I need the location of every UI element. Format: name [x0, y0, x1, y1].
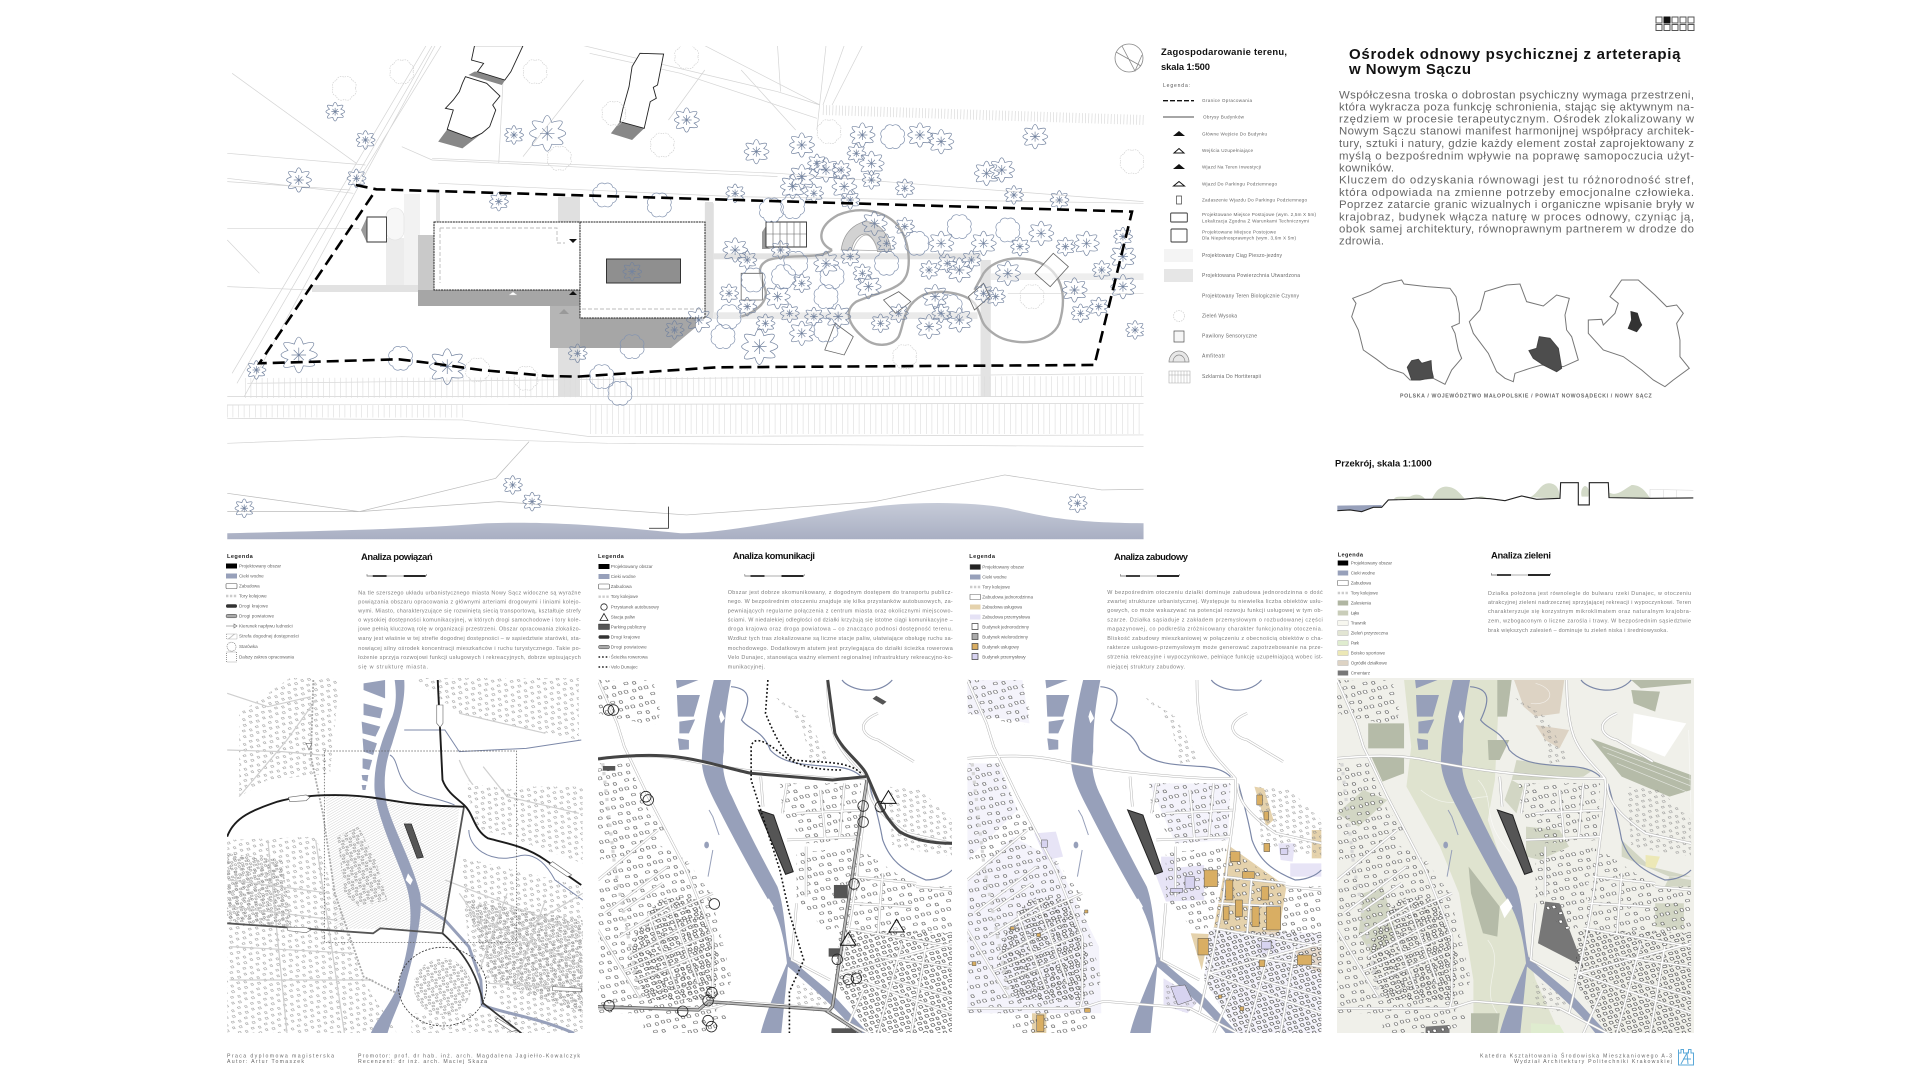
text: Velo Dunajec, stanowiąca ważny element regionalnej infrastruktury rekreacyjno-ko- — [728, 655, 953, 661]
curving sensory path — [741, 210, 1063, 345]
text — [1488, 591, 1691, 634]
legend: Budynek jednorodzinny — [982, 624, 1030, 630]
legend: Dalszy zakres opracowania — [239, 654, 294, 660]
heading: Analiza zieleni — [1491, 550, 1551, 560]
text: charakteryzuje się korzystnym mikroklimatem oraz naturalnym krajobra- — [1488, 609, 1691, 615]
project description: Kluczem do odzyskania równowagi jest tu różnorodność stref, — [1339, 175, 1694, 187]
legend: Zabudowa — [239, 584, 260, 588]
legend: Zalesienia — [1351, 600, 1371, 606]
text: nowiącej silny ośrodek koncentracji mieszkańców i ruchu turystycznego. Takie po- — [358, 646, 581, 652]
text: nego. W bezpośrednim otoczeniu znajduje się kilka przystanków autobusowych, za- — [728, 599, 953, 605]
heading: Analiza powiązań — [361, 551, 433, 562]
industrial buildings — [1042, 840, 1288, 1005]
text: łożenie sprzyja rozwojowi funkcji usługowych i rekreacyjnych, dobrze wpisujących — [358, 655, 581, 661]
legend: Tory kolejowe — [611, 594, 638, 599]
site plan legend: Wejścia Uzupełniające — [1202, 148, 1253, 153]
legend: Zabudowa przemysłowa — [982, 614, 1030, 620]
legend — [598, 554, 660, 669]
text: atrakcyjnej zieleni nadrzecznej sprzyjającej rekreacji i wypoczynkowi. Teren — [1488, 600, 1691, 606]
legend: Budynek przemysłowy — [982, 654, 1026, 660]
heading: Analiza zabudowy — [1114, 551, 1189, 562]
legend: Legenda — [969, 554, 996, 560]
trees — [235, 45, 1145, 518]
text: W bezpośrednim otoczeniu działki dominuje zabudowa jednorodzinna o dość — [1107, 590, 1323, 596]
text: zwartej strukturze urbanistycznej. Występuje tu niewielka liczba obiektów usłu- — [1107, 599, 1323, 605]
county roads — [598, 780, 867, 1033]
flow arrows — [287, 705, 581, 1032]
legend: Ogródki działkowe — [1351, 660, 1387, 666]
page index squares — [1656, 17, 1694, 30]
panel: greenery analysis — [1337, 550, 1694, 1033]
site plan legend: Szklarnia Do Hortiterapii — [1202, 374, 1261, 380]
legend: Parking publiczny — [611, 624, 647, 629]
project description: obok samej architektury, równoprawnym partnerem w drodze do — [1339, 224, 1694, 236]
text — [1107, 590, 1323, 670]
legend: Cieki wodne — [611, 574, 636, 579]
map: Malopolskie — [1469, 284, 1578, 382]
legend: Cieki wodne — [1351, 570, 1375, 576]
panel: built-up analysis — [967, 551, 1323, 1033]
infographic board — [226, 16, 1694, 1066]
amphitheatre — [841, 222, 891, 252]
panel: connections analysis — [226, 551, 583, 1033]
site plan heading — [1161, 46, 1287, 72]
allotments — [1514, 680, 1569, 748]
footer: department: Wydział Architektury Politechniki Krakowskiej — [1514, 1059, 1672, 1065]
legend: Legenda — [227, 554, 254, 560]
section marker — [649, 507, 668, 528]
projected buildings — [367, 217, 705, 318]
text: brak większych zalesień – dominuje tu zieleń niska i średniowysoka. — [1488, 628, 1668, 634]
text: munikacyjnej. — [728, 664, 765, 670]
project description: Współczesna troska o dobrostan psychiczny wymaga przestrzeni, — [1339, 90, 1694, 102]
hatch bands along the boulevard — [245, 386, 1144, 388]
site plan legend: Wjazd Na Teren Inwestycji — [1202, 164, 1261, 170]
legend: Drogi krajowe — [239, 604, 268, 608]
legend — [969, 554, 1033, 660]
site plan legend: Projektowany Teren Biologicznie Czynny — [1202, 294, 1300, 300]
legend: Kierunek napływu ludności — [239, 624, 293, 628]
legend: Projektowany obszar — [239, 564, 281, 568]
legend: Projektowany obszar — [611, 564, 653, 569]
footer: author: Praca dyplomowa magisterska — [227, 1054, 334, 1060]
panel: site plan 1:500 — [227, 45, 1145, 539]
fuel stations — [841, 791, 904, 945]
legend — [226, 554, 299, 662]
site plan legend: Projektowane Miejsce Postojowe — [1202, 230, 1276, 234]
text — [728, 590, 953, 670]
legend: Cieki wodne — [982, 574, 1007, 580]
legend: Boisko sportowe — [1351, 650, 1385, 656]
bus stops — [603, 705, 886, 1032]
scale bar — [367, 574, 427, 577]
footer: author: Autor: Artur Tomaszek — [227, 1059, 304, 1065]
text: strzenia rekreacyjne i wypoczynkowe, pełniące funkcję uzupełniającą wobec ist- — [1107, 654, 1323, 660]
legend: Zabudowa jednorodzinna — [982, 594, 1033, 600]
cross-section drawing — [1337, 483, 1693, 512]
text: Działka położona jest równolegle do bulwaru rzeki Dunajec, w otoczeniu — [1488, 591, 1691, 597]
building A north — [438, 46, 523, 148]
riverside meadow — [1404, 680, 1560, 1033]
site plan legend — [1163, 83, 1316, 383]
main title — [1348, 46, 1681, 78]
map: connections — [227, 677, 583, 1033]
text: Wzdłuż tych tras zlokalizowane są liczne stacje paliw, ułatwiające obsługę ruchu sa- — [728, 636, 953, 642]
text: droga krajowa oraz droga powiatowa – co znacząco podnosi dostępność terenu. — [728, 626, 953, 632]
text: zem, wzbogaconym o liczne zarośla i trawy. W bezpośrednim sąsiedztwie — [1488, 618, 1691, 624]
footer: supervisors: Recenzent: dr inż. arch. Maciej Skaza — [358, 1059, 487, 1065]
text: jowe pełnią kluczową rolę w organizacji przestrzeni. Obszar opracowania zlokalizo- — [357, 627, 581, 633]
service zones — [1032, 787, 1321, 1033]
footer: supervisors — [358, 1054, 580, 1065]
location caption: POLSKA / WOJEWÓDZTWO MAŁOPOLSKIE / POWIAT NOWOSĄDECKI / NOWY SĄCZ — [1400, 391, 1653, 399]
project description: która wykracza poza funkcję schronienia, stając się aktywnym na- — [1339, 102, 1694, 114]
greenhouse — [766, 222, 806, 247]
site plan legend: Projektowane Miejsce Postojowe (wym. 2,5m X 5m) — [1202, 212, 1316, 217]
legend — [1338, 552, 1392, 676]
project description: krajobraz, budynek włącza naturę w proces odnowy, czyniąc ją, — [1339, 211, 1694, 223]
text: mochodowego. Dodatkowym atutem jest przylegająca do działki ścieżka rowerowa — [728, 646, 953, 652]
site plan legend: Pawilony Sensoryczne — [1202, 334, 1257, 340]
footer: supervisors: Promotor: prof. dr hab. inż. arch. Magdalena Jagiełło-Kowalczyk — [358, 1054, 580, 1060]
legend: Zieleń przyrzeczna — [1351, 630, 1388, 636]
map: transport — [598, 680, 952, 1035]
text: gowych, co może wskazywać na potencjał rozwoju funkcji usługowej w tym ob- — [1107, 608, 1323, 614]
map: Poland — [1352, 280, 1462, 384]
text: wany jest właśnie w tej strefie dogodnej dostępności – w sąsiedztwie starówki, sta- — [357, 636, 581, 642]
text: szarze. Działka sąsiaduje z zakładem przemysłowym o rozbudowanej części — [1107, 618, 1323, 624]
legend: Cieki wodne — [239, 574, 264, 578]
location maps — [1352, 280, 1689, 387]
map: Nowosadecki county — [1588, 280, 1689, 387]
parking — [603, 696, 887, 1035]
legend: Zabudowa — [1351, 580, 1371, 586]
heading: Analiza komunikacji — [733, 550, 815, 561]
map: built-up — [967, 680, 1321, 1033]
project description: tury, sztuki i natury, gdzie każdy element został zaprojektowany z — [1339, 138, 1694, 150]
site plan legend: Obrysy Budynków — [1203, 114, 1245, 120]
text: pewniających regularne połączenia z centrum miasta oraz okolicznymi miejscowo- — [728, 608, 953, 614]
footer: author — [227, 1054, 334, 1065]
building B north — [611, 53, 664, 140]
legend: Zabudowa — [611, 584, 632, 589]
site plan legend: Dla Niepełnosprawnych (wym. 3,6m X 5m) — [1202, 236, 1296, 240]
site plan legend: Projektowany Ciąg Pieszo-jezdny — [1202, 253, 1282, 259]
site plan legend: Granice Opracowania — [1202, 98, 1252, 103]
text: powiązania obszaru opracowania z głównymi arteriami drogowymi i liniami kolejo- — [358, 599, 581, 605]
panel: transport analysis — [598, 550, 953, 1035]
icon: university logo — [1678, 1050, 1694, 1065]
legend: Strefa dogodnej dostępności — [239, 634, 299, 638]
text: o wysokiej dostępności komunikacyjnej, w których drogi samochodowe i tory kole- — [358, 618, 581, 624]
site plan heading: Zagospodarowanie terenu, — [1161, 46, 1287, 57]
site plan heading: skala 1:500 — [1161, 61, 1210, 72]
project description: Poprzez zatarcie granic wizualnych i organiczne wpisanie bryły w — [1339, 199, 1695, 211]
text: ściami. W niedalekiej odległości od działki krzyżują się istotne ciągi komunikacyjne – — [728, 618, 953, 624]
footer: department — [1480, 1052, 1672, 1065]
legend: Drogi powiatowe — [239, 614, 274, 618]
legend: Projektowany obszar — [1351, 560, 1392, 566]
site plan legend: Zadaszenie Wjazdu Do Parkingu Podziemnego — [1202, 198, 1307, 202]
site plan legend: Lokalizacja Zgodna Z Warunkami Technicznymi — [1202, 218, 1309, 224]
main title: Ośrodek odnowy psychicznej z arteterapią — [1349, 46, 1681, 63]
text: Na tle szerszego układu urbanistycznego miasta Nowy Sącz widoczne są wyraźne — [358, 590, 581, 596]
text: rakterze usługowo-przemysłowym może generować zapotrzebowanie na prze- — [1107, 645, 1323, 651]
site plan legend: Projektowana Powierzchnia Utwardzona — [1202, 273, 1300, 279]
scale bar — [1120, 574, 1180, 577]
project description: Nowym Sączu stanowi manifest harmonijnej współpracy architek- — [1339, 126, 1694, 138]
legend: Park — [1351, 640, 1360, 646]
footer: department: Katedra Kształtowania Środowiska Mieszkaniowego A-3 — [1480, 1052, 1672, 1060]
text: niejącej struktury zabudowy. — [1107, 664, 1185, 670]
industrial and residential zones — [967, 680, 1321, 1033]
surrounding survey lines — [227, 46, 1144, 515]
garden paths — [705, 203, 1144, 397]
lawns and sports field — [1631, 713, 1686, 757]
legend: Tory kolejowe — [982, 584, 1010, 590]
legend: Budynek usługowy — [982, 644, 1020, 650]
legend: Łąka — [1351, 610, 1359, 616]
service buildings — [972, 795, 1312, 1032]
site plan legend: Legenda: — [1163, 83, 1190, 89]
national road — [598, 680, 952, 843]
text: wymi. Miasto, charakteryzujące się rozwiniętą siecią transportową, kształtuje strefy — [357, 609, 581, 615]
site surfaces — [312, 193, 713, 397]
legend: Velo Dunajec — [611, 664, 638, 669]
project description: kowników. — [1339, 162, 1394, 174]
site plan legend: Główne Wejście Do Budynku — [1202, 132, 1267, 136]
rail hatch band — [823, 110, 1144, 120]
legend: Ścieżka rowerowa — [611, 652, 648, 659]
legend: Trawnik — [1351, 620, 1367, 626]
project description: myślą o bezpośrednim wpływie na poprawę samopoczucia użyt- — [1339, 150, 1694, 162]
legend: Tory kolejowe — [239, 594, 267, 598]
legend: Budynek wielorodzinny — [982, 634, 1029, 640]
project description: rzędziem w procesie terapeutycznym. Ośrodek zlokalizowany w — [1339, 114, 1695, 126]
text: Obszar jest dobrze skomunikowany, z dogodnym dostępem do transportu publicz- — [728, 590, 953, 596]
site plan legend: Wjazd Do Parkingu Podziemnego — [1202, 182, 1277, 186]
map: greenery — [1337, 678, 1694, 1033]
scale bar — [1491, 573, 1551, 576]
investment boundary — [259, 185, 1132, 377]
project description — [1339, 90, 1695, 248]
text: Bliskość zabudowy mieszkaniowej w połączeniu z obecnością obiektów o cha- — [1107, 636, 1323, 642]
legend: Starówka — [239, 644, 258, 649]
legend: Przystanek autobusowy — [611, 604, 660, 609]
legend: Zabudowa usługowa — [982, 604, 1022, 610]
text: magazynowej, co podkreśla zróżnicowany charakter funkcjonalny otoczenia. — [1107, 626, 1323, 632]
scale bar — [744, 574, 804, 577]
building shadows — [361, 217, 772, 348]
legend: Stacja paliw — [611, 614, 636, 619]
site plan legend: Amfiteatr — [1202, 354, 1225, 360]
north arrow — [1115, 44, 1143, 72]
text: się w strukturę miasta. — [358, 664, 428, 670]
main title: w Nowym Sączu — [1348, 61, 1471, 78]
text — [357, 590, 581, 670]
legend: Projektowany obszar — [982, 564, 1024, 570]
project description: zdrowia. — [1339, 236, 1384, 248]
project description: która odpowiada na zmienne potrzeby emocjonalne człowieka. — [1339, 187, 1694, 199]
legend: Legenda — [1338, 552, 1364, 558]
legend: Legenda — [598, 554, 625, 560]
legend: Tory kolejowe — [1351, 590, 1378, 596]
sensory pavilions — [741, 253, 1068, 355]
legend: Cmentarz — [1351, 670, 1371, 676]
section heading: Przekrój, skala 1:1000 — [1335, 458, 1432, 468]
legend: Drogi krajowe — [611, 634, 640, 639]
bike routes — [765, 680, 861, 773]
legend: Drogi powiatowe — [611, 644, 647, 649]
site plan legend: Zieleń Wysoka — [1202, 314, 1237, 320]
